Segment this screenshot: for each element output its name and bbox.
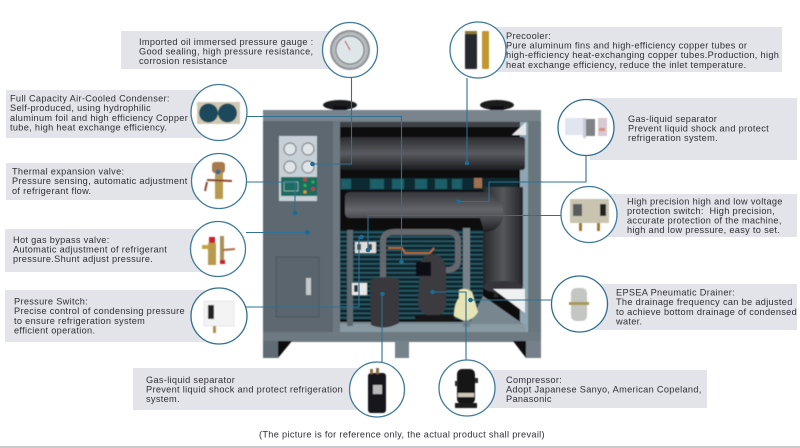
- icon: precooler tubes: [450, 22, 506, 78]
- text: precooler: high-efficiency heat-exchanging copper tubes.Production, high: [506, 50, 779, 60]
- icon: pneumatic drainer: [552, 276, 608, 332]
- text: thermal expansion valve: Pressure sensing, automatic adjustment: [12, 176, 188, 186]
- icon: pressure gauge: [322, 22, 378, 78]
- teal coil band: [340, 178, 518, 190]
- text: compressor: Compressor:: [506, 375, 562, 385]
- text: compressor: Adopt Japanese Sanyo, American Copeland,: [506, 384, 702, 394]
- white gap beside drain: [493, 289, 525, 313]
- text: compressor: Panasonic: [506, 394, 552, 404]
- text: full capacity air-cooled condenser: aluminum foil and high efficiency Copper: [10, 113, 188, 123]
- text: hot gas bypass valve: Hot gas bypass valve:: [13, 235, 110, 245]
- icon: high and low voltage protection switch: [561, 186, 617, 242]
- separator tank: [483, 187, 523, 287]
- left post and contactors: [347, 230, 353, 326]
- upper pipe: [340, 137, 525, 170]
- text: precooler: Pure aluminum fins and high-efficiency copper tubes or: [506, 40, 747, 50]
- icon: pressure switch: [191, 288, 247, 344]
- text: precooler: Precooler:: [506, 31, 551, 41]
- text: high precision switch: accurate protection of the machine,: [627, 216, 782, 226]
- text: pressure switch: to ensure refrigeration system: [14, 316, 145, 326]
- icon: condenser: [191, 84, 247, 140]
- leader dots: [293, 161, 473, 302]
- cabinet frame: [263, 110, 541, 332]
- top flanges: [323, 100, 514, 111]
- text: full capacity air-cooled condenser: Self-produced, using hydrophilic: [10, 103, 151, 113]
- floor: [340, 296, 526, 331]
- text: high precision switch: protection switch: High precision,: [627, 206, 775, 216]
- text: thermal expansion valve: Thermal expansion valve:: [12, 166, 124, 176]
- text: pressure switch: Pressure Switch:: [14, 296, 88, 306]
- text: imported oil immersed pressure gauge: corrosion resistance: [139, 56, 228, 66]
- text: full capacity air-cooled condenser: tube, high heat exchange efficiency.: [10, 122, 167, 132]
- text: EPSEA pneumatic drainer: water.: [615, 316, 642, 326]
- leader lines: [246, 78, 586, 362]
- gauge panel: [279, 136, 317, 201]
- text: gas-liquid separator right: Gas-liquid separator: [628, 114, 717, 124]
- compressor: [418, 254, 446, 316]
- icon: thermal expansion valve: [192, 154, 246, 208]
- condenser fins: [340, 230, 483, 320]
- text: high precision switch: high and low pressure, easy to set.: [627, 225, 780, 235]
- copper tube: [388, 248, 434, 253]
- icon: heat exchanger cutaway: [558, 100, 614, 156]
- text: EPSEA pneumatic drainer: to achieve bottom drainage of condensed: [616, 307, 797, 317]
- text: EPSEA pneumatic drainer: The drainage frequency can be adjusted: [616, 297, 793, 307]
- text: gas-liquid separator right: Prevent liquid shock and protect: [628, 124, 769, 134]
- text: hot gas bypass valve: pressure.Shunt adjust pressure.: [13, 254, 153, 264]
- suction hose: [383, 232, 458, 279]
- text: high precision switch: High precision high and low voltage: [627, 196, 783, 206]
- icon: gas-liquid separator bottle: [350, 362, 404, 417]
- text: gas-liquid separator bottom: Gas-liquid separator: [146, 375, 235, 385]
- text: imported oil immersed pressure gauge: Imported oil immersed pressure gauge :: [139, 37, 314, 47]
- drain bottle: [454, 289, 478, 320]
- text: hot gas bypass valve: Automatic adjustment of refrigerant: [13, 244, 167, 254]
- left door panel: [263, 121, 333, 332]
- text: thermal expansion valve: of refrigerant flow.: [12, 186, 91, 196]
- icon: hot gas bypass valve: [190, 222, 246, 276]
- bottom rule: [0, 446, 800, 448]
- text: pressure switch: Precise control of condensing pressure: [14, 306, 185, 316]
- feet: [263, 332, 541, 358]
- icon: compressor: [439, 360, 495, 416]
- lower pipe: [345, 192, 503, 232]
- machine: refrigerated air dryer: [263, 100, 541, 358]
- text: pressure switch: efficient operation.: [14, 326, 95, 336]
- text: gas-liquid separator bottom: system.: [146, 394, 180, 404]
- text: EPSEA pneumatic drainer: EPSEA Pneumatic Drainer:: [616, 288, 735, 298]
- text: gas-liquid separator bottom: Prevent liquid shock and protect refrigeration: [146, 384, 343, 394]
- accumulator: [370, 277, 399, 328]
- text: gas-liquid separator right: refrigeration system.: [628, 133, 718, 143]
- text: full capacity air-cooled condenser: Full Capacity Air-Cooled Condenser:: [10, 94, 170, 104]
- post: [463, 228, 470, 327]
- text: imported oil immersed pressure gauge: Good sealing, high pressure resistance,: [139, 46, 313, 56]
- text: precooler: heat exchange efficiency, reduce the inlet temperature.: [506, 60, 746, 70]
- footnote: (The picture is for reference only, the actual product shall prevail): [259, 430, 545, 440]
- interior: [333, 122, 528, 332]
